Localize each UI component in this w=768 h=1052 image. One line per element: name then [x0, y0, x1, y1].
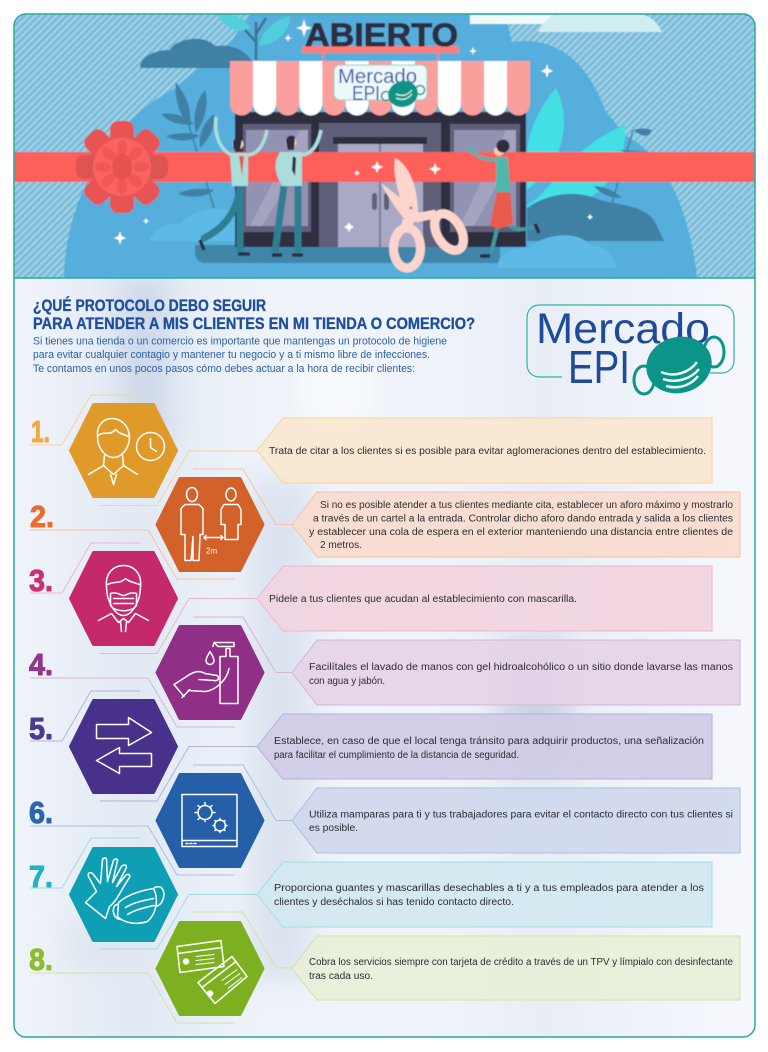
light cloud left	[150, 209, 235, 241]
title	[33, 296, 475, 333]
callout 7: Proporciona guantes y mascarillas desechables a ti y a tus empleados para atender a los	[274, 883, 704, 894]
number 4: 4.	[29, 647, 53, 682]
hexagon icon: person and clock	[70, 404, 176, 496]
callout 5: Establece, en caso de que el local tenga tránsito para adquirir productos, una señalización	[274, 736, 704, 747]
connector lines 1	[30, 395, 257, 506]
top clouds	[470, 14, 662, 32]
callout 5	[257, 714, 712, 779]
dark hill right	[527, 194, 664, 241]
callout 5: para facilitar el cumplimiento de la distancia de seguridad.	[274, 750, 519, 761]
sign ABIERTO: ABIERTO	[305, 17, 458, 53]
connector lines 3	[30, 543, 257, 654]
hexagon icon: opposite arrows	[70, 700, 176, 792]
callout 6: Utiliza mamparas para ti y tus trabajadores para evitar el contacto directo con tus clientes si	[309, 810, 733, 820]
hexagon icon: hand and gel dispenser	[157, 626, 263, 718]
sparkles	[114, 19, 593, 245]
callout 2	[292, 492, 740, 557]
small logo on awning: Mercado	[338, 66, 417, 88]
hexagon icon: protective screen with virus	[157, 774, 263, 866]
ground shadow	[195, 245, 500, 263]
callout 6: es posible.	[309, 823, 358, 834]
callout 6	[292, 788, 740, 853]
connector lines 2	[30, 469, 292, 579]
title: PARA ATENDER A MIS CLIENTES EN MI TIENDA O COMERCIO?	[33, 314, 475, 333]
connector lines 4	[30, 617, 292, 727]
callout 2: y establecer una cola de espera en el exterior manteniendo una distancia entre clientes de	[309, 527, 733, 538]
tree with leaves	[217, 14, 290, 60]
step 7	[29, 838, 712, 949]
number 1: 1.	[31, 414, 50, 449]
hexagon icon: two people 2 m apart: 2m	[206, 546, 217, 556]
callout 7	[257, 862, 712, 927]
sign ABIERTO	[301, 22, 460, 62]
connector lines 5	[30, 691, 257, 801]
intro paragraph: para evitar cualquier contagio y mantener tu negocio y a ti mismo libre de infecciones.	[33, 349, 430, 361]
title: ¿QUÉ PROTOCOLO DEBO SEGUIR	[33, 296, 266, 315]
callout 7: clientes y deséchalos si has tenido contacto directo.	[274, 897, 514, 908]
callout 2: Si no es posible atender a tus clientes mediante cita, establecer un aforo máximo y mostrarlo	[320, 500, 733, 511]
number 2: 2.	[30, 499, 54, 534]
figure: man left	[200, 117, 267, 254]
callout 3	[257, 566, 712, 631]
awning	[230, 61, 530, 116]
number 7: 7.	[29, 859, 53, 894]
right plant	[594, 128, 652, 204]
callout 2: a través de un cartel a la entrada. Controlar dicho aforo dando entrada y salida a los clientes	[313, 514, 733, 524]
left plant	[161, 83, 214, 208]
red ribbon	[14, 152, 755, 182]
callout 8: Cobra los servicios siempre con tarjeta de crédito a través de un TPV y límpialo con desinfectante	[309, 957, 733, 968]
step 4	[29, 617, 740, 727]
panel: hero illustration	[14, 14, 755, 278]
intro paragraph: Te contamos en unos pocos pasos cómo debes actuar a la hora de recibir clientes:	[33, 363, 415, 375]
hexagon icon: two people 2 m apart	[157, 478, 263, 570]
callout 1	[257, 418, 712, 483]
hexagon icon: person with face mask	[70, 552, 176, 644]
small logo on awning	[334, 65, 427, 110]
step 2	[30, 469, 740, 579]
intro paragraph	[33, 336, 447, 375]
blue background blob	[64, 14, 697, 278]
step 3	[29, 543, 712, 654]
number 8: 8.	[29, 942, 53, 977]
callout 3: Pidele a tus clientes que acudan al establecimiento con mascarilla.	[269, 594, 577, 605]
figure: woman	[468, 140, 539, 256]
figure: man right	[272, 130, 321, 255]
callout 1: Trata de citar a los clientes si es posible para evitar aglomeraciones dentro del establecimiento.	[269, 446, 706, 457]
right teal leaves	[527, 88, 625, 215]
scissors	[381, 158, 469, 268]
callout 2: 2 metros.	[320, 540, 362, 551]
logo Mercado EPI	[527, 305, 734, 401]
dark cloud top left	[140, 39, 256, 68]
step 8	[29, 912, 740, 1023]
number 6: 6.	[29, 795, 53, 830]
callout 4: Facilítales el lavado de manos con gel hidroalcohólico o un sitio donde lavarse las manos	[309, 662, 733, 673]
callout 8: tras cada uso.	[309, 971, 373, 982]
connector lines 8	[30, 912, 292, 1023]
shop building	[235, 112, 526, 247]
hexagon icon: glove and mask	[70, 848, 176, 940]
connector lines 6	[30, 765, 292, 875]
step 5	[29, 691, 712, 801]
number 5: 5.	[29, 711, 53, 746]
intro paragraph: Si tienes una tienda o un comercio es importante que mantengas un protocolo de higiene	[33, 336, 447, 348]
callout 4	[292, 640, 740, 705]
callout 8	[292, 936, 740, 1000]
ribbon flower	[76, 121, 168, 213]
step 6	[29, 765, 740, 875]
number 3: 3.	[29, 563, 53, 598]
small logo on awning: EPI	[352, 83, 380, 105]
panel: lower background	[14, 278, 755, 1037]
connector lines 7	[30, 838, 257, 949]
hexagon icon: credit cards	[157, 922, 263, 1014]
logo Mercado EPI: Mercado	[536, 305, 710, 353]
step 1	[30, 395, 712, 506]
logo Mercado EPI: EPI	[568, 341, 630, 393]
light cloud right	[497, 235, 617, 268]
callout 4: con agua y jabón.	[309, 676, 385, 687]
